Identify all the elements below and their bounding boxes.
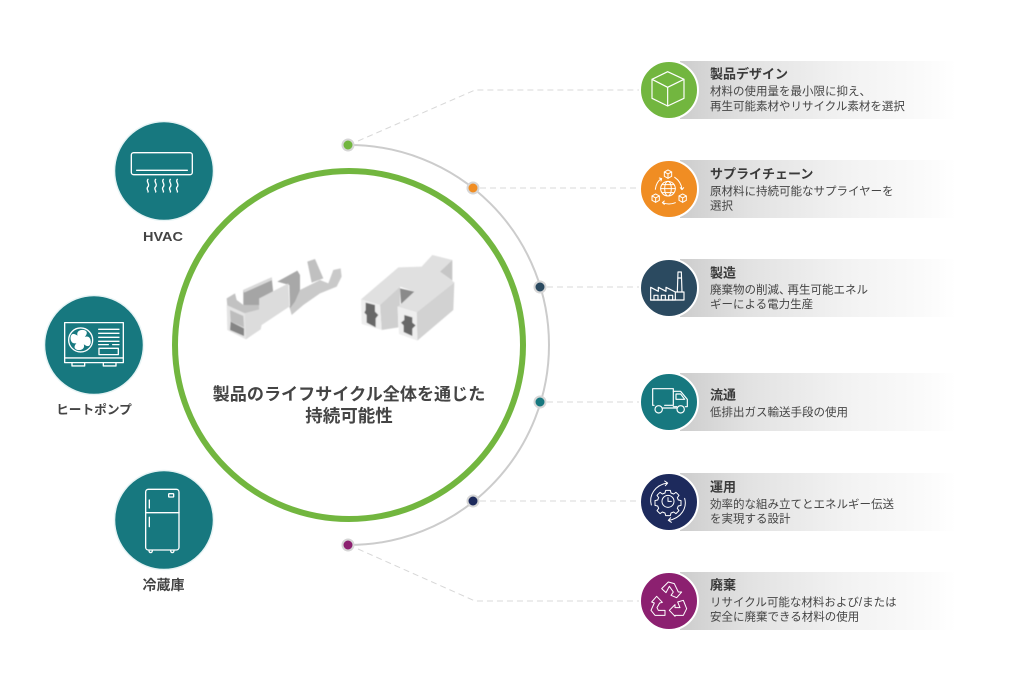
application: refrigerator: 冷蔵庫 bbox=[142, 577, 184, 593]
icon: globe with cubes bbox=[652, 170, 686, 204]
panel: supply chain: サプライチェーン bbox=[710, 166, 813, 182]
panel: manufacturing bbox=[640, 259, 956, 317]
icon: refrigerator bbox=[146, 489, 179, 553]
icon: factory bbox=[651, 272, 684, 300]
central green circle bbox=[175, 171, 523, 519]
icon: cube bbox=[652, 72, 684, 106]
panel: product design: 材料の使用量を最小限に抑え、 bbox=[710, 84, 871, 98]
arc dots bbox=[342, 140, 546, 550]
panel: distribution: 流通 bbox=[710, 388, 736, 402]
lifecycle arc bbox=[349, 145, 549, 545]
dashed connector lines bbox=[358, 90, 640, 601]
panel: disposal: 廃棄 bbox=[710, 578, 736, 592]
application: refrigerator bbox=[114, 470, 214, 593]
panel: disposal bbox=[640, 572, 956, 630]
panel: operation: 運用 bbox=[710, 480, 736, 494]
panel: manufacturing: ギーによる電力生産 bbox=[710, 297, 813, 311]
icon: truck bbox=[653, 389, 687, 413]
panel: supply chain: 選択 bbox=[710, 198, 733, 212]
panel: operation: を実現する設計 bbox=[710, 512, 791, 526]
icon: gear with clock bbox=[651, 481, 685, 522]
application: heat pump bbox=[44, 296, 144, 417]
panel: supply chain bbox=[640, 160, 956, 218]
panel: manufacturing: 製造 bbox=[710, 266, 736, 280]
panel: manufacturing: 廃棄物の削減、再生可能エネル bbox=[710, 282, 868, 296]
panel: disposal: 安全に廃棄できる材料の使用 bbox=[710, 610, 859, 624]
icon: heat pump unit bbox=[65, 323, 123, 366]
panel: product design: 製品デザイン bbox=[710, 66, 788, 82]
panel: product design: 再生可能素材やリサイクル素材を選択 bbox=[710, 99, 905, 113]
panel: product design bbox=[640, 61, 956, 119]
plastic housing illustration bbox=[361, 255, 454, 341]
panel: operation bbox=[640, 473, 956, 531]
icon: air conditioner bbox=[131, 153, 192, 192]
metal terminal illustration bbox=[227, 259, 342, 339]
application: HVAC: HVAC bbox=[143, 230, 183, 244]
title: 製品のライフサイクル全体を通じた bbox=[213, 384, 485, 404]
panel: disposal: リサイクル可能な材料および/または bbox=[710, 595, 897, 609]
panel: supply chain: 原材料に持続可能なサプライヤーを bbox=[710, 184, 894, 198]
application: heat pump: ヒートポンプ bbox=[56, 403, 132, 417]
application: HVAC bbox=[114, 122, 214, 244]
title bbox=[213, 384, 485, 426]
icon: recycling arrows bbox=[651, 582, 687, 616]
panel: distribution bbox=[640, 373, 956, 431]
panel: distribution: 低排出ガス輸送手段の使用 bbox=[710, 405, 848, 419]
title: 持続可能性 bbox=[305, 406, 393, 426]
panel: operation: 効率的な組み立てとエネルギー伝送 bbox=[710, 497, 894, 511]
